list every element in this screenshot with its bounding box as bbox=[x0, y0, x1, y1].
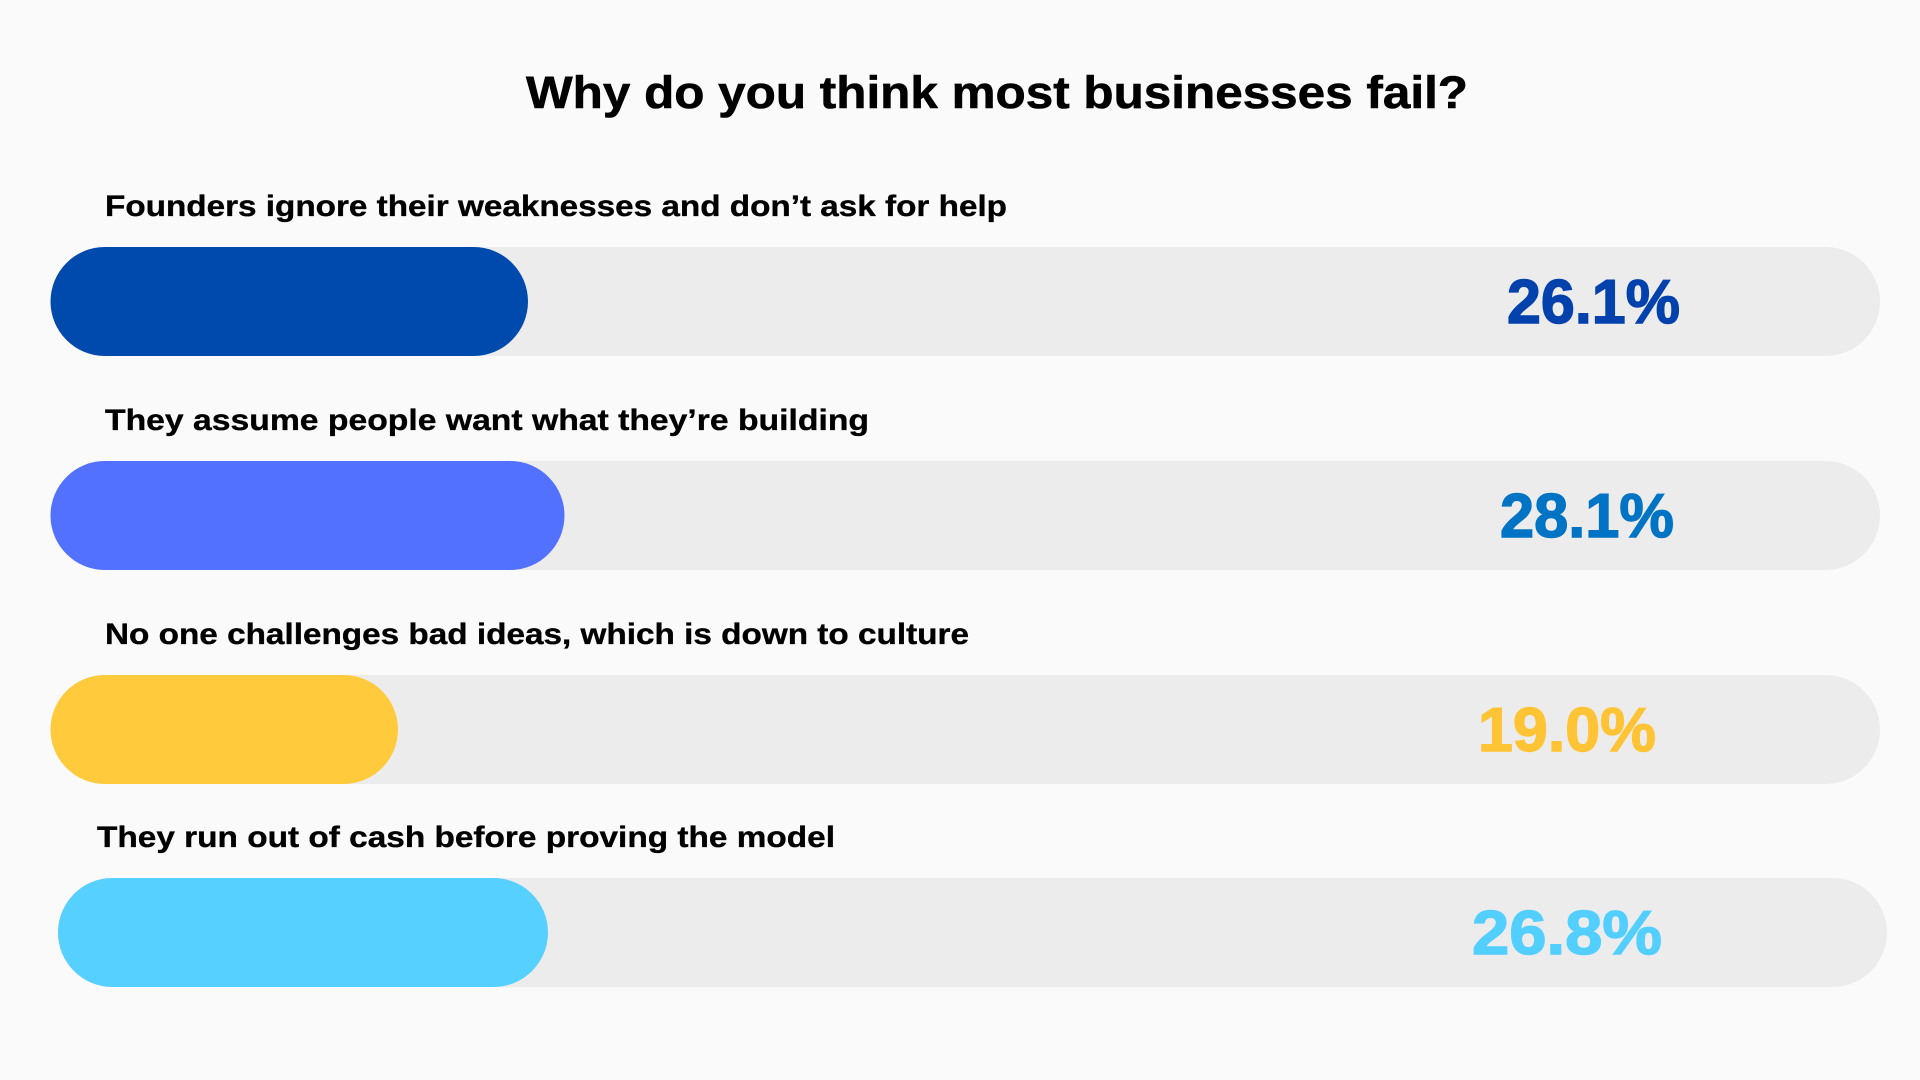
value: 19.0%: 19.0% bbox=[1478, 696, 1656, 765]
label: founders: Founders ignore their weaknesses and don’t ask for help bbox=[105, 190, 1007, 223]
label: cash: They run out of cash before proving the model bbox=[97, 821, 835, 854]
value: 26.8%: 26.8% bbox=[1472, 899, 1662, 968]
row: founders ignore weaknesses bbox=[50, 190, 1880, 356]
bar fill: founders 26.1% bbox=[50, 247, 528, 356]
row: assumptions about demand bbox=[50, 404, 1880, 570]
label: assumptions: They assume people want what they’re building bbox=[105, 404, 869, 437]
title: Why do you think most businesses fail? bbox=[526, 67, 1468, 118]
bar fill: culture 19.0% bbox=[50, 675, 398, 784]
row: cash bbox=[58, 821, 1887, 987]
value: 26.1%: 26.1% bbox=[1507, 268, 1680, 337]
bar track: cash bbox=[58, 878, 1887, 987]
bar fill: cash 26.8% bbox=[58, 878, 548, 987]
bar track: assumptions bbox=[50, 461, 1880, 570]
bar track: founders bbox=[50, 247, 1880, 356]
row: culture bbox=[50, 618, 1880, 784]
bar fill: assumptions 28.1% bbox=[50, 461, 564, 570]
bar track: culture bbox=[50, 675, 1880, 784]
label: culture: No one challenges bad ideas, which is down to culture bbox=[105, 618, 969, 651]
value: 28.1%: 28.1% bbox=[1500, 482, 1674, 551]
